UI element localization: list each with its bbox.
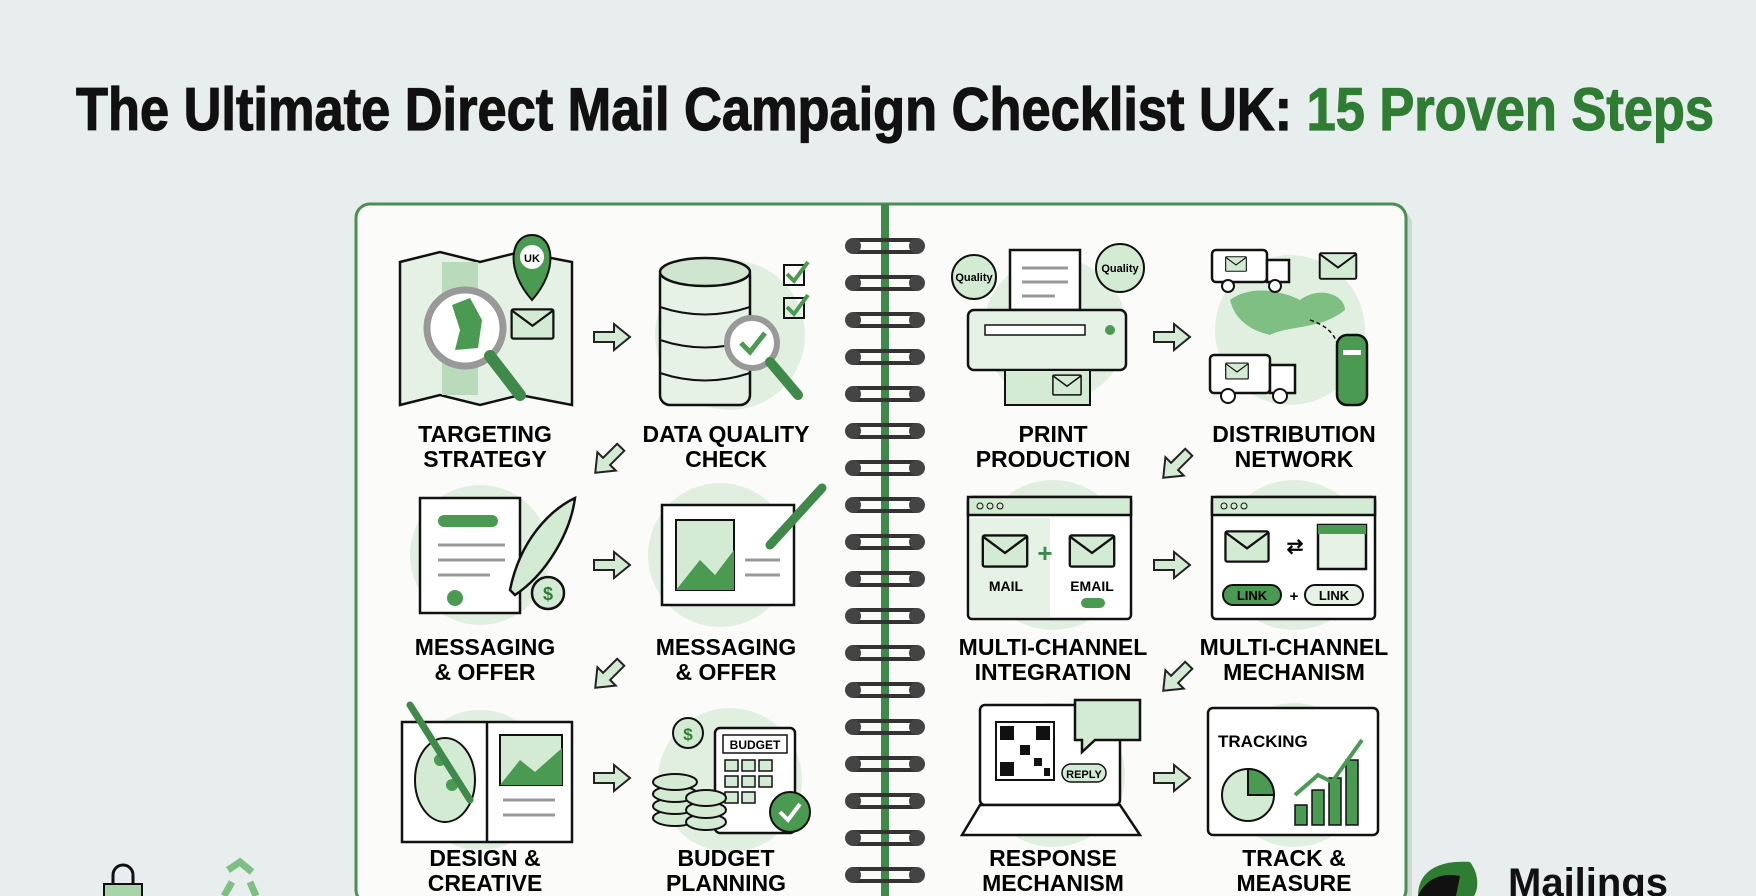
icon: messaging canvas [648,483,822,627]
icon: response mechanism laptop: REPLY [1066,769,1102,781]
label: track & measure: MEASURE [1236,870,1352,896]
icon: data quality [655,258,808,410]
icon: tracking chart: TRACKING [1218,732,1308,751]
arrow [594,324,630,350]
label: messaging & offer: & OFFER [435,659,536,685]
icon: distribution network [1210,250,1367,405]
icon: targeting map [400,235,572,405]
arrow [1154,324,1190,350]
icon: multi-channel mechanism: ⇄ [1287,536,1304,558]
label: multi-channel mechanism: MULTI-CHANNEL [1200,634,1388,660]
diagonal arrow [586,438,630,482]
title: The Ultimate Direct Mail Campaign Checklist UK: 15 Proven Steps [76,76,1714,143]
icon: targeting map: UK [524,253,540,265]
notebook [356,204,1412,896]
icon: multi-channel mechanism: LINK [1319,588,1350,603]
icon: print production: Quality [955,272,994,284]
icon: multi-channel mechanism: + [1290,588,1299,605]
icon: multi-channel integration: MAIL [989,578,1024,594]
arrow [594,765,630,791]
label: response mechanism: RESPONSE [989,845,1117,871]
label: design & creative: DESIGN & [429,845,541,871]
arrow [1154,552,1190,578]
label: messaging & offer 2: & OFFER [676,659,777,685]
diagonal arrow [586,653,630,697]
label: print production: PRINT [1018,421,1088,447]
label: targeting strategy: STRATEGY [423,446,547,472]
label: budget planning: BUDGET [677,845,775,871]
label: multi-channel integration: MULTI-CHANNEL [959,634,1147,660]
icon: budget [653,708,810,852]
icon: multi-channel integration: + [1037,538,1053,568]
icon: print production [952,244,1144,405]
icon: multi-channel mechanism: LINK [1237,588,1268,603]
label: print production: PRODUCTION [976,446,1130,472]
label: data quality check: CHECK [685,446,767,472]
label: response mechanism: MECHANISM [982,870,1124,896]
label: data quality check: DATA QUALITY [643,421,809,447]
icon: messaging scroll [410,485,575,625]
label: distribution network: DISTRIBUTION [1212,421,1376,447]
icon: response mechanism laptop [962,700,1140,847]
icon: multi-channel integration [968,480,1131,630]
icon: multi-channel mechanism [1212,480,1375,630]
label: design & creative: CREATIVE [428,870,542,896]
label: distribution network: NETWORK [1235,446,1354,472]
label: messaging & offer: MESSAGING [415,634,555,660]
icon: budget: $ [683,725,693,744]
icon: recycle [224,862,256,896]
label: track & measure: TRACK & [1242,845,1346,871]
label: budget planning: PLANNING [666,870,786,896]
icon: design book [402,705,572,850]
logo: Mailings [1418,861,1668,896]
icon: messaging scroll: $ [543,584,553,604]
icon: print production: Quality [1101,263,1140,275]
label: messaging & offer 2: MESSAGING [656,634,796,660]
label: multi-channel mechanism: MECHANISM [1223,659,1365,685]
icon: padlock [104,865,142,896]
label: multi-channel integration: INTEGRATION [975,659,1131,685]
diagonal arrow [1154,443,1198,487]
icon: multi-channel integration: EMAIL [1070,578,1114,594]
arrow [1154,765,1190,791]
icon: tracking chart [1208,703,1378,847]
icon: budget: BUDGET [730,738,781,752]
diagonal arrow [1154,656,1198,700]
arrow [594,552,630,578]
label: targeting strategy: TARGETING [418,421,552,447]
spiral binding [845,238,925,883]
